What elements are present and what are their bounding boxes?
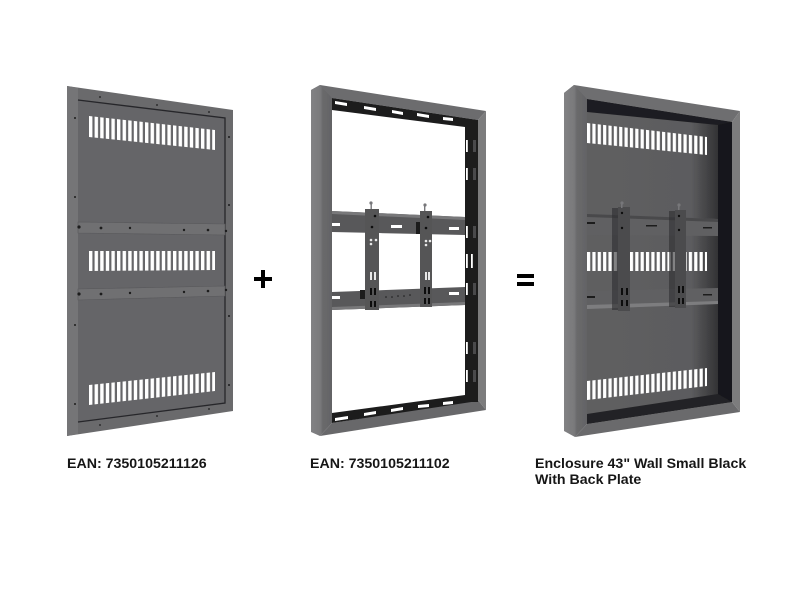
top face bbox=[311, 85, 486, 120]
left face bbox=[311, 85, 332, 436]
left face bbox=[564, 85, 587, 437]
interior right wall bbox=[718, 122, 732, 402]
right bracket shadow bbox=[669, 211, 675, 307]
top strip slots bbox=[335, 101, 453, 121]
top vent slots bbox=[587, 123, 707, 155]
left bracket shadow bbox=[612, 208, 618, 310]
right inner black strip bbox=[465, 124, 478, 402]
right edge bbox=[732, 111, 740, 412]
right edge bbox=[478, 111, 486, 410]
bottom vent slots bbox=[587, 368, 707, 400]
lower rail bbox=[78, 286, 225, 300]
middle vent slots bbox=[587, 252, 707, 271]
left upright bracket bbox=[365, 201, 379, 310]
equals sign bbox=[517, 274, 534, 286]
frame with mount product bbox=[311, 85, 486, 436]
right upright bracket bbox=[420, 203, 432, 307]
plus sign bbox=[254, 270, 272, 288]
caption: enclosure name: Enclosure 43" Wall Small Black bbox=[535, 456, 746, 472]
plate body bbox=[67, 86, 233, 436]
left flange bbox=[67, 86, 78, 436]
interior bottom shadow bbox=[587, 394, 732, 424]
complete enclosure product bbox=[564, 85, 740, 437]
top face bbox=[564, 85, 740, 122]
caption: back plate EAN: EAN: 7350105211126 bbox=[67, 456, 207, 472]
middle vent slots bbox=[89, 251, 215, 271]
interior back plate bbox=[587, 99, 732, 424]
right strip grey recesses bbox=[473, 140, 476, 382]
right strip slots bbox=[466, 140, 473, 382]
screw holes bbox=[74, 96, 230, 426]
bottom inner black strip bbox=[332, 395, 478, 423]
bottom face bbox=[320, 400, 486, 436]
inner recess shadow bbox=[78, 100, 225, 422]
bottom face bbox=[575, 402, 740, 437]
rails bbox=[332, 211, 465, 235]
caption: frame EAN: EAN: 7350105211102 bbox=[310, 456, 450, 472]
back plate product bbox=[67, 86, 233, 436]
bottom strip slots bbox=[335, 401, 453, 421]
caption: enclosure name: With Back Plate bbox=[535, 472, 641, 488]
inner panel bbox=[78, 100, 225, 422]
left bracket bbox=[618, 201, 630, 311]
rail clip and hole row bbox=[360, 222, 420, 299]
rail slot marks bbox=[587, 222, 712, 298]
rail slots bbox=[332, 223, 459, 299]
bottom vent slots bbox=[89, 372, 215, 405]
rails bbox=[587, 214, 718, 236]
interior top shadow bbox=[587, 99, 732, 125]
caption: enclosure name bbox=[535, 456, 746, 488]
right bracket bbox=[675, 203, 686, 308]
upper rail bbox=[78, 222, 225, 235]
top inner black strip bbox=[332, 98, 478, 127]
top vent slots bbox=[89, 116, 215, 150]
